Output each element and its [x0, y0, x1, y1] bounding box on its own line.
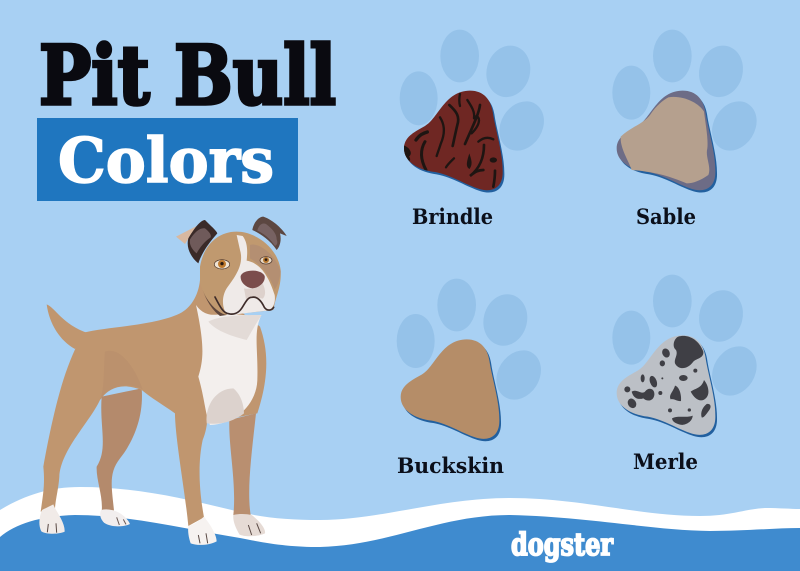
paw: Sable: [612, 30, 766, 193]
right eye: [260, 257, 272, 264]
paw: Brindle: [400, 30, 553, 193]
left eye: [214, 260, 230, 269]
right ear: [252, 217, 287, 250]
paw: Merle: [612, 275, 766, 437]
tail: [47, 304, 88, 349]
dog illustration: [39, 217, 287, 545]
far rear leg: [97, 388, 142, 512]
nose: [241, 271, 265, 288]
white blaze and muzzle: [223, 235, 275, 315]
far rear paw: [100, 509, 130, 526]
far front paw: [233, 514, 265, 536]
head shading: [250, 245, 281, 289]
muzzle shading: [244, 283, 265, 299]
mouth: [215, 297, 274, 314]
rear left paw: [39, 504, 65, 534]
label: Sable: Sable: [636, 204, 696, 229]
left ear: [176, 220, 217, 263]
paw: Buckskin: [397, 279, 550, 441]
white wave: [0, 487, 800, 571]
collar neck shadow: [201, 282, 227, 316]
label: Buckskin: Buckskin: [397, 453, 504, 478]
title: Pit Bull: Pit Bull: [39, 29, 336, 124]
label: Brindle: Brindle: [412, 204, 493, 229]
near front leg: [175, 397, 207, 526]
throat shading: [208, 315, 262, 340]
far front leg: [229, 413, 256, 515]
near front paw: [188, 517, 217, 545]
logo: dogster: dogster: [511, 527, 614, 563]
chest shading: [207, 388, 244, 424]
blue wave: [0, 515, 800, 571]
white chest: [196, 305, 261, 425]
body shading: [100, 351, 143, 400]
head: [200, 232, 281, 315]
body and near rear leg: [41, 280, 266, 512]
title box: Colors: Colors: [58, 124, 274, 197]
label: Merle: Merle: [633, 449, 698, 474]
